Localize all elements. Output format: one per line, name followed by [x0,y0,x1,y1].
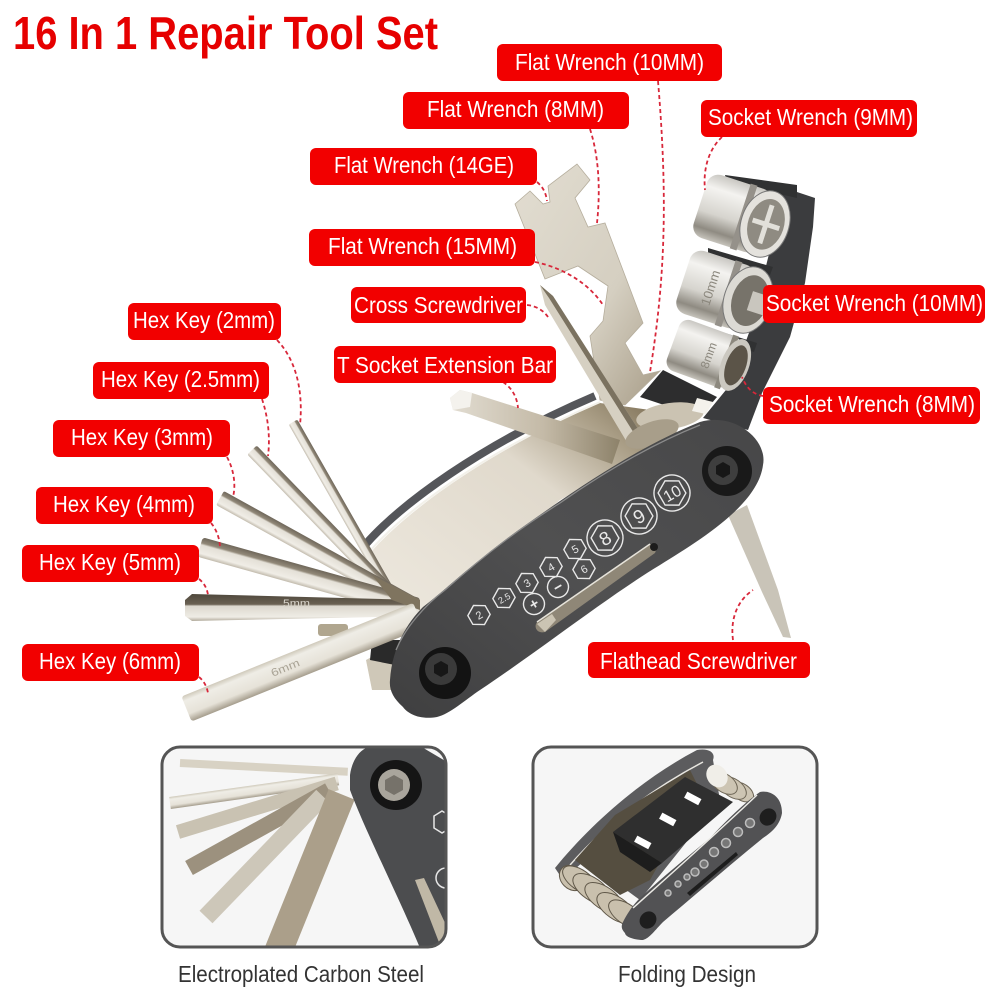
connector: hex key 5mm [199,579,208,595]
size markings: 2.5 [496,591,512,606]
size markings: + [526,595,542,614]
socket 10mm [673,247,783,340]
size markings: − [550,578,566,597]
caption: folding design: Folding Design [618,961,756,987]
tool slot [536,543,658,632]
screw bottom left [419,647,471,699]
label: hex key 2mm: Hex Key (2mm) [133,307,275,333]
socket holder [703,190,815,430]
hex key 2mm [289,420,402,609]
cross screwdriver [540,285,642,444]
front plate slot [687,852,738,896]
black stowed block [613,777,733,863]
back plate arc [365,396,595,545]
socket 10mm: 10mm [698,268,723,307]
inner beige plate [371,403,660,625]
connector: hex key 6mm [199,677,208,693]
label: cross screwdriver: Cross Screwdriver [354,292,523,318]
hex key 3mm [216,491,418,613]
connector: hex key 2mm [277,340,301,425]
white rod tip [706,764,728,788]
detail screw [370,760,422,810]
screw top right [702,446,752,496]
T socket extension bar [450,390,620,464]
hex key 6mm: 6mm [269,657,302,680]
folded tool front plate [622,792,782,940]
holder base [640,370,717,417]
connector: T socket extension bar [503,382,518,408]
label: flathead screwdriver [588,642,810,678]
folded tool stack [622,398,713,455]
hex key 2.5mm [247,445,414,617]
label: flat wrench 14GE: Flat Wrench (14GE) [334,152,514,178]
stowed metal tips [318,624,402,690]
label: T socket extension bar: T Socket Extension Bar [337,352,553,378]
hex converge shadow [372,575,420,610]
label: hex key 4mm [36,487,213,524]
connector: socket wrench 8mm [742,377,763,396]
hex key 6mm [181,603,423,721]
flathead screwdriver blade [728,505,791,638]
back plate highlight [370,402,600,551]
label: hex key 3mm: Hex Key (3mm) [71,424,213,450]
caption: electroplated carbon steel: Electroplated Carbon Steel [178,961,424,987]
label: socket wrench 10mm: Socket Wrench (10MM) [766,290,983,316]
connector: socket wrench 9mm [705,137,722,190]
label: flat wrench 15mm [309,229,535,266]
connector: flat wrench 10mm [650,81,664,372]
label: socket wrench 8mm: Socket Wrench (8MM) [769,391,975,417]
connector: hex key 4mm [211,523,220,548]
panel: folding design detail [533,747,817,947]
connector: flat wrench 15mm [535,262,603,305]
size markings: 8 [596,528,616,551]
folded tool back plate and cavity [555,749,720,900]
size markings: 6 [579,563,590,577]
socket 8mm: 8mm [698,340,720,370]
label: T socket extension bar [334,346,556,383]
label: flat wrench 10mm: Flat Wrench (10MM) [515,49,704,75]
connector: flat wrench 8mm [590,129,599,223]
label: cross screwdriver [351,287,526,323]
connector: flathead screwdriver [732,590,753,640]
socket 8mm [663,316,758,396]
label: flathead screwdriver: Flathead Screwdriver [600,648,797,674]
top right coils [714,774,754,802]
folded tool coils [558,864,633,924]
size markings: 2 [474,609,485,623]
detail handle plate [350,746,447,948]
size markings: 10 [661,482,685,506]
label: flat wrench 14GE [310,148,537,185]
size markings: 3 [522,577,533,591]
main multi-tool illustration [181,164,815,721]
label: hex key 5mm: Hex Key (5mm) [39,549,181,575]
hex key 5mm: 5mm [283,598,310,610]
label: flat wrench 8mm: Flat Wrench (8MM) [427,96,604,122]
label: hex key 2.5mm [93,362,269,399]
label: flat wrench 8mm [403,92,629,129]
label: hex key 5mm [22,545,199,582]
connector: flat wrench 14GE [537,182,547,201]
label: flat wrench 10mm [497,44,722,81]
front handle plate [390,420,764,718]
label: hex key 3mm [53,420,230,457]
hex key 5mm [185,594,420,621]
plate edge highlight [396,425,700,650]
label: socket wrench 9mm: Socket Wrench (9MM) [708,104,913,130]
detail hex keys [169,759,355,957]
size markings: 4 [546,561,557,575]
size markings [465,468,697,630]
detail slot and symbols [415,810,444,942]
label: hex key 6mm: Hex Key (6mm) [39,648,181,674]
panel: electroplated carbon steel detail [162,746,456,957]
label: socket wrench 9mm [701,100,917,137]
block slots [634,792,701,849]
holder clips [693,175,797,352]
size markings: 5 [570,543,581,557]
title: 16 In 1 Repair Tool Set [13,7,438,59]
socket 9mm [690,171,798,264]
flat wrench [515,164,660,405]
label: hex key 2mm [128,303,281,340]
hex key 4mm [197,537,420,617]
size markings: 9 [630,506,650,529]
label: hex key 6mm [22,644,199,681]
label: hex key 4mm: Hex Key (4mm) [53,491,195,517]
front plate markings [665,818,754,896]
connector: cross screwdriver [527,305,548,317]
label: hex key 2.5mm: Hex Key (2.5mm) [101,366,260,392]
label: flat wrench 15mm: Flat Wrench (15MM) [328,233,517,259]
connector: hex key 3mm [227,457,234,497]
front plate screws [636,805,780,932]
label: socket wrench 10mm [763,285,985,323]
label: socket wrench 8mm [763,387,980,424]
connector: hex key 2.5mm [262,399,269,456]
